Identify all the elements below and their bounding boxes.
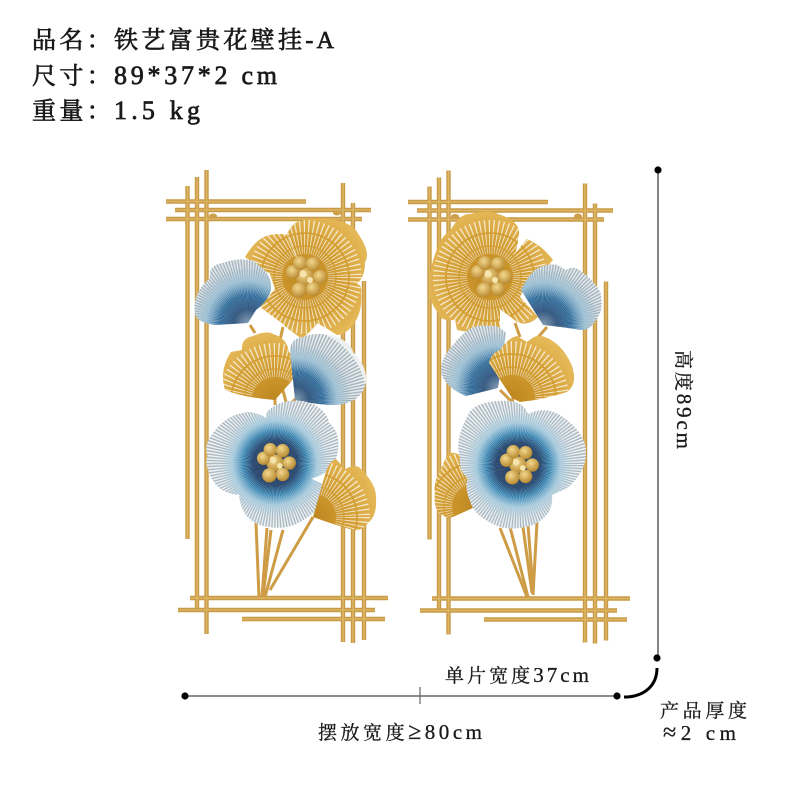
right gold ginkgo bbox=[489, 336, 574, 402]
right gold frame bbox=[408, 170, 630, 644]
left blue ginkgo lower bbox=[290, 334, 366, 405]
label: thickness: 产品厚度 bbox=[660, 700, 747, 722]
product weight: 重量： bbox=[32, 98, 114, 125]
dimension: height line bbox=[653, 166, 662, 662]
product name: 铁艺富贵花壁挂-A bbox=[114, 27, 335, 54]
left gold flower bbox=[245, 219, 367, 339]
right blue ginkgo upper bbox=[521, 264, 602, 330]
product size: 尺寸： bbox=[32, 63, 114, 90]
left gold frame bbox=[166, 170, 388, 643]
left gold ginkgo bbox=[223, 332, 293, 400]
right gold flower bbox=[430, 212, 553, 332]
product weight bbox=[32, 96, 200, 125]
label: single panel width: 单片宽度37cm bbox=[445, 663, 589, 687]
product size bbox=[32, 61, 277, 90]
left stems bbox=[250, 325, 313, 597]
label: height: 高度 89cm bbox=[672, 350, 696, 449]
label: thickness bbox=[660, 700, 747, 746]
right blue flower bbox=[458, 401, 586, 529]
right small gold ginkgo bbox=[434, 452, 473, 518]
right blue ginkgo lower bbox=[440, 326, 506, 396]
product specification text bbox=[32, 27, 335, 125]
product weight: 1.5 kg bbox=[114, 96, 200, 125]
label: thickness: ≈2 cm bbox=[663, 720, 736, 746]
left small gold ginkgo bbox=[313, 459, 376, 530]
left blue ginkgo upper bbox=[194, 259, 272, 325]
product size: 89*37*2 cm bbox=[114, 61, 277, 90]
dimension: thickness curve bbox=[624, 668, 657, 697]
panel: right wall art bbox=[408, 170, 630, 644]
product name bbox=[32, 27, 335, 54]
product name: 品名： bbox=[32, 27, 114, 54]
dimension: width line bbox=[181, 687, 621, 704]
panel: left wall art bbox=[166, 170, 388, 643]
label: placement width: 摆放宽度≥80cm bbox=[318, 719, 482, 745]
left blue flower bbox=[206, 401, 339, 528]
right stems bbox=[500, 323, 547, 597]
